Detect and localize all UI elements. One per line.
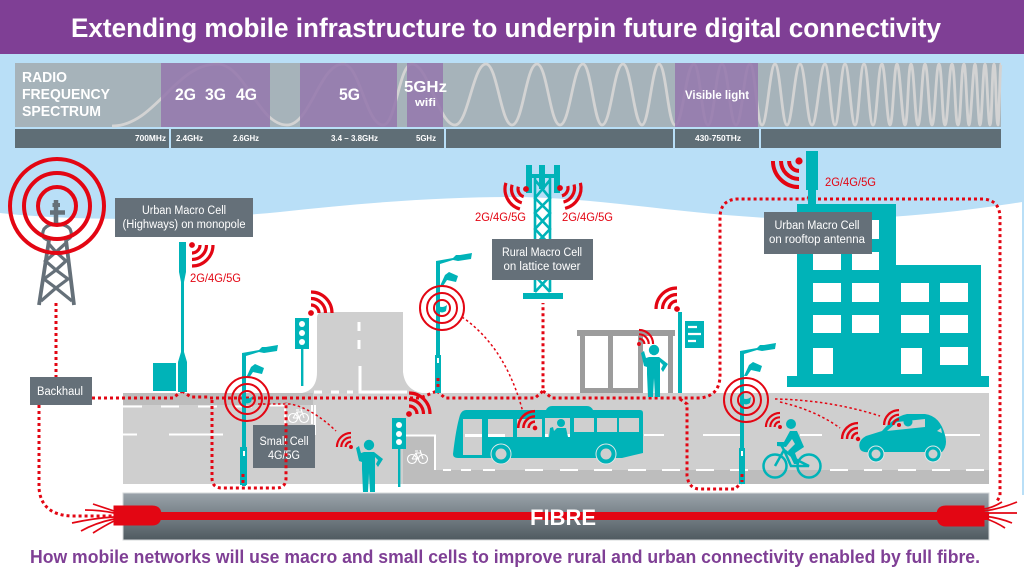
backhaul dotted routes bbox=[39, 190, 1000, 516]
label: urban macro rooftop: on rooftop antenna bbox=[769, 234, 866, 246]
icon: office building bbox=[773, 151, 989, 387]
icon: traffic light two bbox=[392, 393, 430, 487]
spectrum bands bbox=[161, 63, 758, 127]
antennas bbox=[526, 165, 560, 193]
label: rural macro: on lattice tower bbox=[504, 261, 581, 273]
frequency labels: 3.4 – 3.8GHz bbox=[331, 134, 378, 143]
band labels bbox=[175, 79, 749, 109]
band labels: wifi bbox=[414, 97, 436, 109]
fibre label: FIBRE bbox=[530, 505, 596, 530]
wave bbox=[112, 64, 1001, 126]
label: urban macro rooftop bbox=[764, 212, 872, 254]
frequency labels bbox=[135, 134, 741, 143]
icon: rural lattice tower bbox=[475, 165, 613, 299]
title: Extending mobile infrastructure to underpin future digital connectivity bbox=[71, 13, 941, 43]
road markings bbox=[123, 322, 984, 470]
cycle lane symbols bbox=[288, 409, 428, 464]
signal rings bbox=[225, 377, 269, 421]
bus windows bbox=[463, 418, 639, 455]
car wheels bbox=[868, 446, 941, 462]
icon: rural lattice tower: 2G/4G/5G bbox=[562, 210, 613, 224]
street lamp with small cell: centre bbox=[420, 253, 472, 393]
fibre cable bbox=[123, 512, 989, 520]
caption: How mobile networks will use macro and small cells to improve rural and urban connectivity enabled by full fibre. bbox=[30, 547, 980, 567]
frequency labels: 2.4GHz bbox=[176, 134, 203, 143]
windows bbox=[813, 220, 968, 374]
signal bbox=[773, 157, 803, 187]
frequency label: 2G/4G/5G bbox=[190, 271, 241, 285]
tower base bbox=[523, 293, 563, 299]
frequency labels: 2.6GHz bbox=[233, 134, 259, 143]
signal rings bbox=[420, 286, 464, 330]
frequency labels: 5GHz bbox=[416, 134, 436, 143]
white hill ground bbox=[0, 197, 1022, 576]
label: rural macro: Rural Macro Cell bbox=[502, 247, 582, 259]
frequency label: 2G/4G/5G bbox=[825, 175, 876, 189]
spectrum heading: SPECTRUM bbox=[22, 103, 101, 120]
street lamp with small cell: right bbox=[724, 343, 776, 484]
person at bus stop bbox=[637, 330, 668, 397]
bus wheels bbox=[491, 444, 616, 464]
fibre duct bbox=[72, 493, 1017, 540]
fibre connector left bbox=[72, 504, 161, 533]
icon: bus shelter bbox=[577, 330, 675, 393]
band labels: 3G bbox=[205, 85, 226, 104]
label: urban macro monopole: Urban Macro Cell bbox=[142, 205, 226, 217]
icon: cyclist bbox=[764, 413, 820, 478]
spectrum heading bbox=[22, 69, 110, 120]
band labels: 2G bbox=[175, 85, 196, 104]
signal rings bbox=[724, 378, 768, 422]
fibre connector right bbox=[937, 502, 1017, 528]
darker lanes bbox=[123, 393, 989, 484]
band labels: 5G bbox=[339, 85, 360, 104]
signal left bbox=[500, 180, 530, 210]
driver bbox=[904, 418, 912, 426]
equipment cabinet bbox=[153, 363, 176, 391]
frequency labels: 2G/4G/5G bbox=[475, 210, 526, 224]
signal bbox=[189, 242, 213, 266]
road line seen through windows bbox=[465, 434, 570, 437]
driver bbox=[549, 419, 568, 437]
road network bbox=[123, 312, 989, 484]
band labels: 5GHz bbox=[404, 79, 447, 96]
person with phone bbox=[337, 433, 383, 492]
band labels: 4G bbox=[236, 85, 257, 104]
icon: bus bbox=[453, 406, 643, 464]
panel: radio frequency spectrum bbox=[15, 63, 1001, 148]
frequency bar bbox=[15, 129, 1001, 148]
signal right bbox=[556, 180, 585, 209]
label: small cell: 4G/5G bbox=[268, 450, 300, 462]
label: rural macro bbox=[492, 239, 593, 280]
label: backhaul: Backhaul bbox=[37, 386, 83, 398]
label: small cell bbox=[253, 425, 315, 468]
label: urban macro monopole: (Highways) on monopole bbox=[122, 219, 246, 231]
signal rings bbox=[10, 159, 104, 253]
main road bbox=[123, 393, 989, 484]
band labels: Visible light bbox=[685, 90, 749, 102]
label: small cell: Small Cell bbox=[260, 436, 308, 448]
spectrum heading: RADIO bbox=[22, 69, 67, 86]
frequency labels: 430-750THz bbox=[695, 134, 741, 143]
icon: traffic light one bbox=[295, 292, 332, 386]
sky background bbox=[0, 54, 1024, 234]
label: urban macro monopole bbox=[115, 198, 253, 237]
icon: bus stop sign bbox=[656, 288, 704, 393]
spectrum heading: FREQUENCY bbox=[22, 86, 110, 103]
side road bbox=[302, 312, 422, 393]
label: urban macro rooftop: Urban Macro Cell bbox=[774, 220, 860, 232]
frequency labels: 700MHz bbox=[135, 134, 166, 143]
icon: main radio tower bbox=[10, 159, 104, 305]
icon: monopole macro cell bbox=[153, 242, 241, 392]
right edge strip bbox=[1022, 204, 1024, 495]
rear light bbox=[937, 428, 942, 433]
car window bbox=[887, 419, 925, 431]
street lamp with small cell: left bbox=[225, 345, 278, 486]
icon: car bbox=[842, 410, 946, 462]
label: backhaul bbox=[30, 377, 92, 405]
title banner bbox=[0, 0, 1024, 54]
